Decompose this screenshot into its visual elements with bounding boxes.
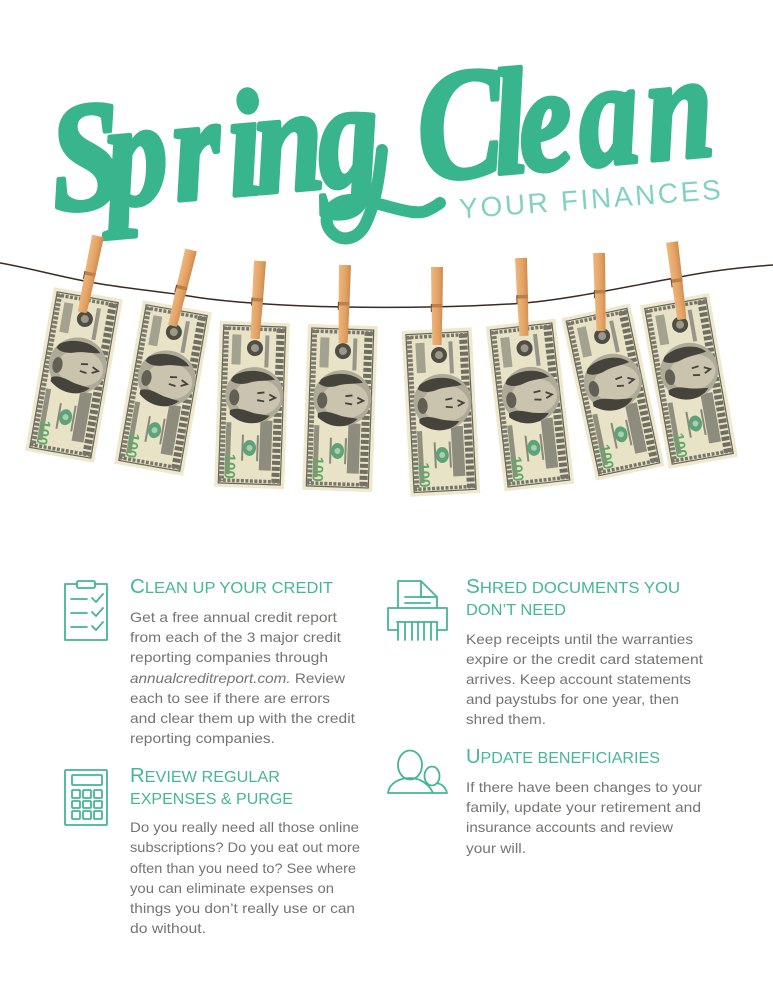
body text: often than you need to? See where	[130, 860, 356, 876]
icon: clipboard checklist	[65, 581, 107, 640]
g swash	[327, 150, 440, 238]
bill 1: 100	[33, 419, 54, 446]
body text: and paystubs for one year, then	[466, 691, 679, 707]
body text: Keep receipts until the warranties	[466, 631, 693, 647]
body text	[130, 819, 360, 936]
body text: insurance accounts and review	[466, 819, 674, 835]
body text: subscriptions? Do you eat out more	[130, 839, 360, 855]
Clean word: Clean	[410, 15, 719, 214]
body text: and clear them up with the credit	[130, 710, 355, 726]
bill 3: 100	[220, 453, 238, 479]
bill 4: 100	[308, 456, 326, 482]
bill 8	[640, 293, 738, 469]
icon: paper shredder	[388, 581, 447, 640]
heading: SHRED DOCUMENTS YOU	[466, 576, 680, 598]
clothespins	[76, 235, 688, 345]
title	[43, 15, 722, 245]
bill 1	[25, 287, 123, 463]
body text	[130, 609, 355, 746]
body text: things you don’t really use or can	[130, 900, 355, 916]
body text: Do you really need all those online	[130, 819, 359, 835]
body text: do without.	[130, 920, 206, 936]
body text: reporting companies through	[130, 649, 328, 665]
heading: REVIEW REGULAR	[130, 765, 280, 787]
icon: people	[388, 750, 447, 793]
body text: family, update your retirement and	[466, 799, 701, 815]
subtitle: YOUR FINANCES	[458, 174, 722, 224]
body text: shred them.	[466, 711, 546, 727]
panel: update beneficiaries	[388, 746, 702, 856]
body text: Get a free annual credit report	[130, 609, 337, 625]
body text: reporting companies.	[130, 730, 275, 746]
panel: shred documents	[388, 576, 703, 727]
heading	[466, 576, 680, 619]
heading: DON’T NEED	[466, 602, 566, 619]
bill 7: 100	[595, 443, 617, 471]
heading: CLEAN UP YOUR CREDIT	[130, 576, 333, 598]
bill 3	[214, 321, 290, 489]
bill 6: 100	[507, 456, 527, 482]
body text	[466, 779, 702, 856]
heading: UPDATE BENEFICIARIES	[466, 746, 660, 768]
body text: each to see if there are errors	[130, 690, 330, 706]
hanging money bills	[25, 287, 738, 497]
panel: review regular expenses	[65, 765, 360, 936]
bill 7	[562, 304, 664, 480]
bill 2	[114, 300, 212, 476]
panel: clean up your credit	[65, 576, 355, 746]
body text: If there have been changes to your	[466, 779, 702, 795]
body text: your will.	[466, 840, 526, 856]
body text: expire or the credit card statement	[466, 651, 703, 667]
bill 6	[486, 319, 574, 491]
heading: EXPENSES & PURGE	[130, 791, 293, 808]
bill 4	[302, 324, 378, 492]
bill 2: 100	[122, 432, 143, 459]
bill 8: 100	[669, 432, 690, 459]
clothesline rope	[0, 263, 773, 307]
body text	[466, 631, 703, 727]
Spring word: Spring	[43, 45, 386, 245]
body text: from each of the 3 major credit	[130, 629, 341, 645]
body text: you can eliminate expenses on	[130, 880, 334, 896]
heading	[130, 765, 293, 808]
bill 5	[402, 327, 480, 497]
icon: calculator	[65, 770, 107, 825]
bill 5: 100	[415, 462, 433, 488]
body text: annualcreditreport.com. Review	[130, 670, 346, 686]
body text: arrives. Keep account statements	[466, 671, 691, 687]
